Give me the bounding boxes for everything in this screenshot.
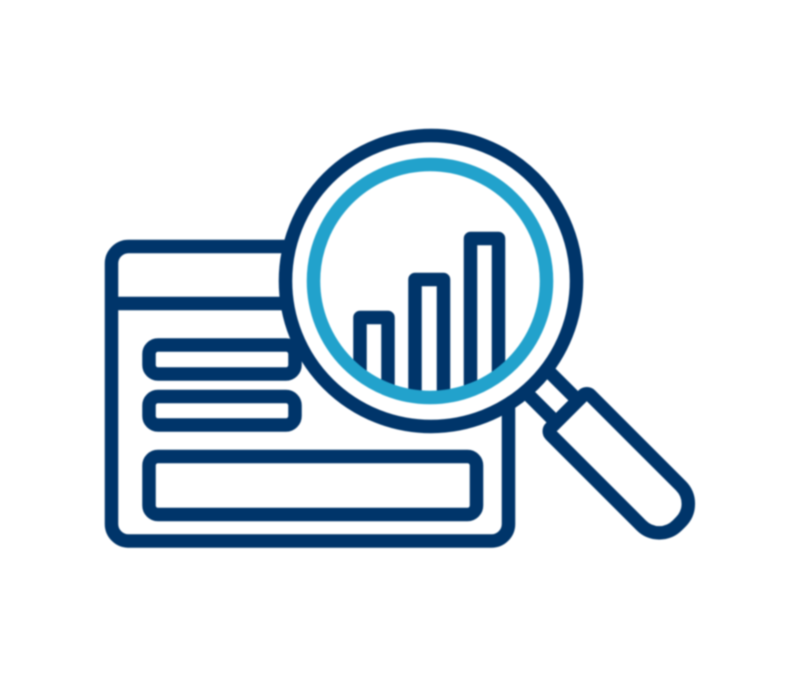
handle grip bbox=[547, 392, 699, 543]
window header divider bbox=[112, 297, 300, 310]
window frame bbox=[112, 246, 508, 541]
icon: magnifying glass handle bbox=[515, 360, 699, 543]
handle neck bbox=[524, 369, 578, 422]
icon: magnifying glass outer ring bbox=[286, 136, 576, 426]
panel: report window bbox=[112, 246, 508, 541]
bar: short bbox=[360, 318, 388, 420]
bar: tall bbox=[470, 238, 498, 420]
bar chart bbox=[360, 238, 498, 420]
icon: report window with magnifying glass bbox=[104, 128, 696, 549]
form field: large bbox=[149, 456, 476, 514]
form field: top bbox=[149, 345, 295, 374]
bar: medium bbox=[415, 280, 444, 420]
icon: magnifying glass inner lens ring bbox=[314, 164, 546, 398]
form field: middle bbox=[149, 396, 295, 425]
